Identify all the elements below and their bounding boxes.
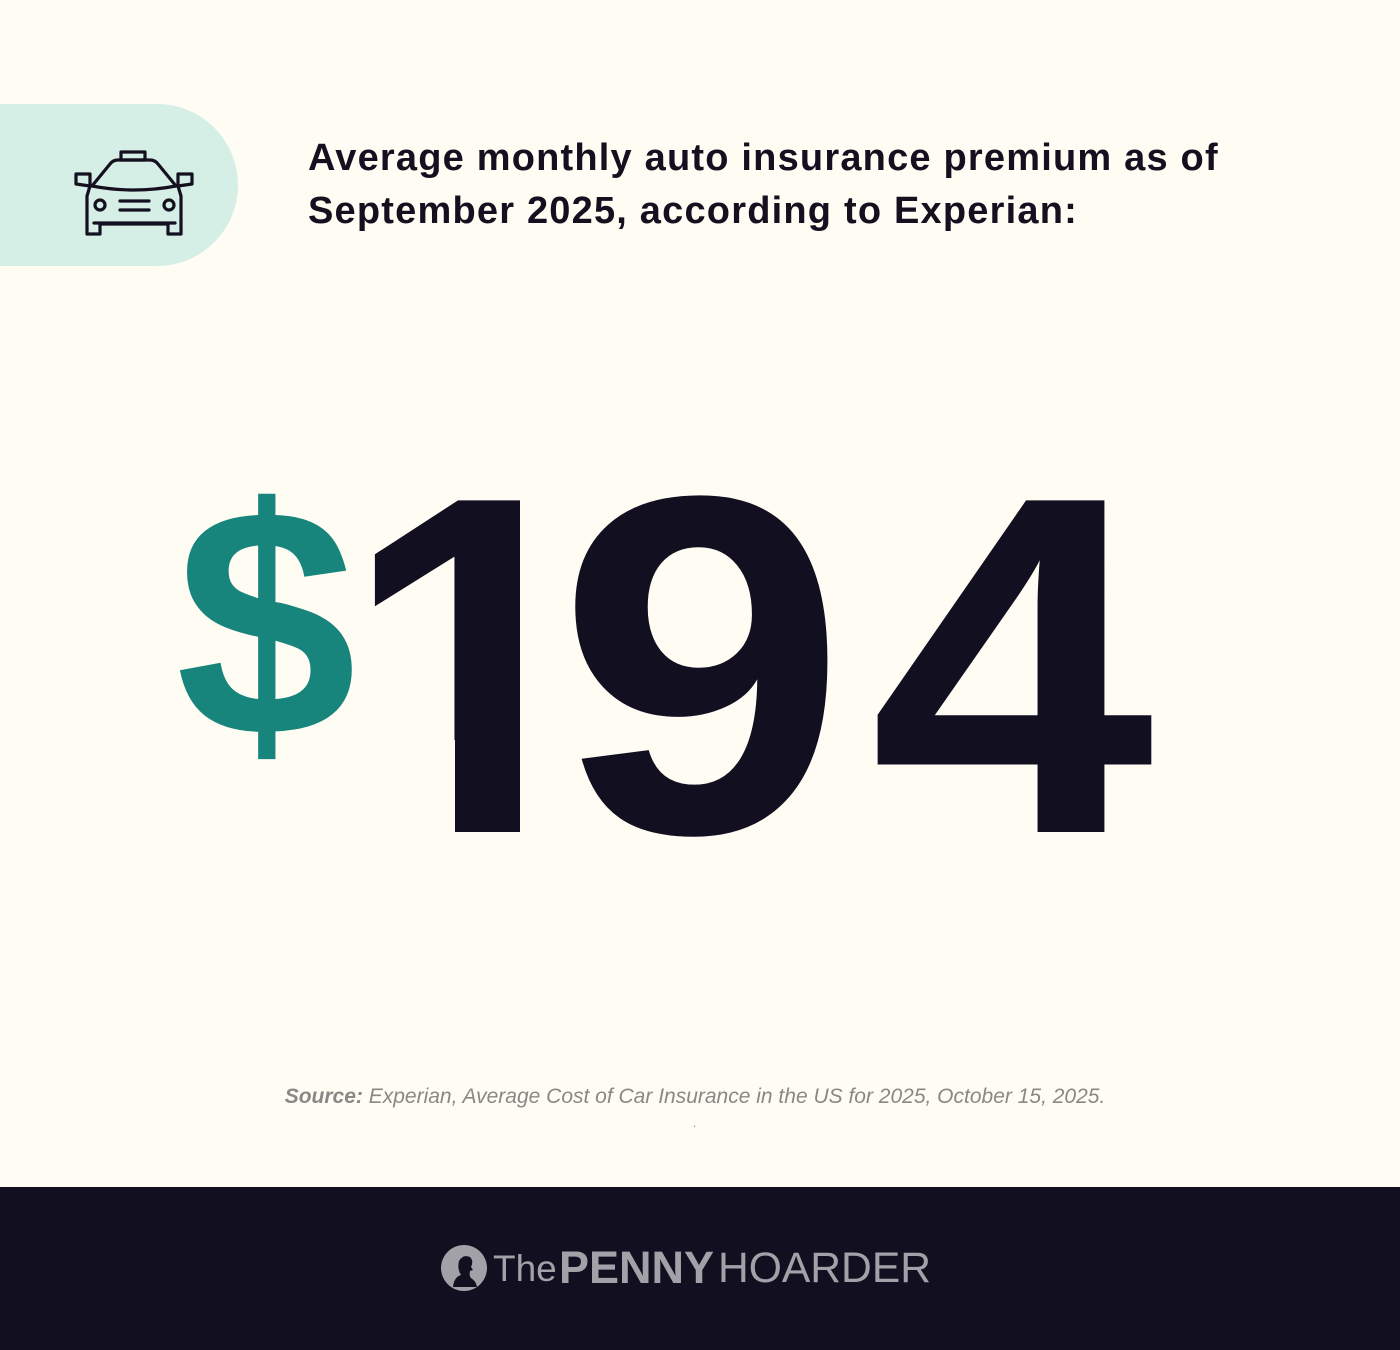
icon badge: car [0,104,238,266]
dollar sign: $ [176,441,356,804]
logo: PENNY [559,1242,714,1293]
logo [441,1242,931,1293]
value 194 [374,495,1152,837]
logo: The [493,1248,557,1289]
source text [285,1085,1105,1130]
big number [176,396,1157,935]
title [308,137,1219,232]
value 194: 1 [342,397,610,935]
value 194: 9 [557,397,847,935]
title: Average monthly auto insurance premium as of [308,137,1219,179]
source text: Source: Experian, Average Cost of Car Insurance in the US for 2025, October 15, 2025. [285,1085,1105,1108]
title: September 2025, according to Experian: [308,190,1078,232]
source text: . [693,1116,697,1130]
logo: HOARDER [718,1244,931,1292]
value 194: 4 [870,396,1157,935]
footer [0,1187,1400,1350]
logo icon [441,1245,487,1291]
